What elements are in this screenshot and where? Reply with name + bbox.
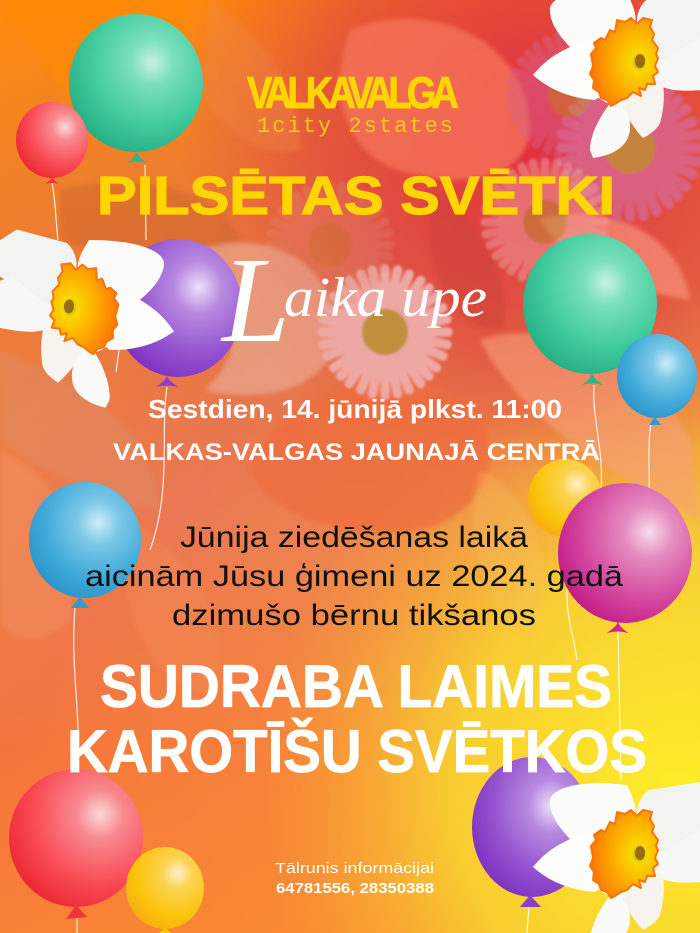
logo: Valka Valga: VALKAVALGA	[247, 67, 459, 118]
script title: Laika upe: L	[220, 233, 290, 368]
main heading: Sudraba laimes karotīšu svētkos: KAROTĪŠU SVĒTKOS	[67, 718, 647, 785]
balloon: yellow middle	[528, 459, 602, 537]
invitation text: aicinām Jūsu ģimeni uz 2024. gadā	[85, 560, 623, 593]
flower: daffodil bottom right	[533, 782, 700, 933]
invitation text	[85, 521, 623, 632]
balloon: magenta	[558, 483, 692, 633]
balloon: blue left	[29, 482, 141, 608]
logo tagline: 1city 2states	[257, 114, 453, 139]
balloon: green top	[69, 14, 203, 163]
balloon: purple bottom	[472, 757, 592, 907]
invitation text: dzimušo bērnu tikšanos	[172, 599, 536, 632]
flower: daffodil left	[0, 227, 183, 414]
balloon: red bottom	[9, 769, 143, 919]
script title: Laika upe: aika upe	[284, 267, 487, 329]
location: VALKAS-VALGAS JAUNAJĀ CENTRĀ	[113, 439, 600, 466]
contact information	[275, 860, 434, 897]
invitation text: Jūnija ziedēšanas laikā	[180, 521, 528, 554]
heading: Pilsētas svētki: PILSĒTAS SVĒTKI	[97, 166, 615, 226]
balloon: blue right	[617, 334, 697, 425]
flower: daffodil top right	[533, 0, 700, 158]
balloon: red small	[16, 102, 88, 184]
contact information: 64781556, 28350388	[276, 880, 434, 897]
main heading: Sudraba laimes karotīšu svētkos	[67, 653, 647, 785]
balloon: green right	[523, 234, 657, 385]
date and time: Sestdien, 14. jūnijā plkst. 11:00	[148, 394, 562, 424]
contact information: Tālrunis informācijai	[275, 860, 434, 877]
balloon: purple	[114, 239, 242, 387]
balloon strings	[52, 165, 651, 933]
balloon: yellow bottom	[126, 847, 204, 933]
main heading: Sudraba laimes karotīšu svētkos: SUDRABA LAIMES	[100, 653, 612, 720]
